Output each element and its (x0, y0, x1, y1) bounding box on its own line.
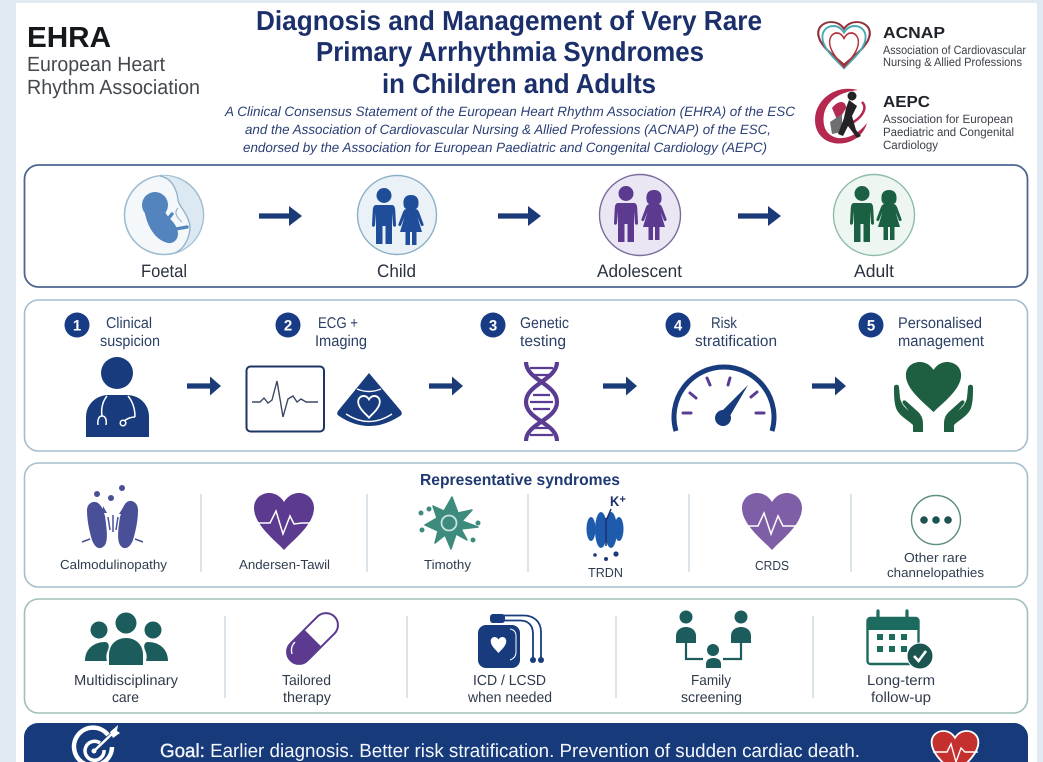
arrow (187, 376, 221, 396)
item: family screening: screening (681, 690, 742, 706)
EHRA logo block: EHRA (27, 22, 111, 54)
AEPC logo: Cardiology (883, 138, 938, 152)
step 2: ECG + imaging: Imaging (315, 333, 367, 350)
AEPC logo: Paediatric and Congenital (883, 125, 1014, 139)
step 4: risk stratification: 4 (674, 318, 683, 334)
label: Adolescent: Adolescent (597, 261, 682, 281)
syndrome: Andersen-Tawil (239, 493, 330, 572)
step 5: personalised management (858, 312, 985, 432)
AEPC logo: AEPC (883, 94, 930, 111)
icon: foetus (124, 176, 204, 254)
title (256, 5, 762, 99)
icon: doctor (86, 357, 149, 437)
syndrome: other rare channelopathies (887, 496, 984, 580)
label: Adult: Adult (854, 261, 894, 281)
step 2: ECG + imaging (246, 312, 402, 432)
ACNAP logo: Association of Cardiovascular (883, 43, 1026, 57)
step 1: clinical suspicion: 1 (73, 318, 81, 334)
step 1: clinical suspicion: Clinical (106, 315, 152, 332)
step 5: personalised management: Personalised (898, 315, 982, 332)
icon: child (358, 176, 436, 254)
step 5: personalised management: management (898, 333, 985, 350)
panel: life stages (24, 165, 1028, 287)
ACNAP logo: ACNAP (883, 25, 945, 42)
step 2: ECG + imaging: ECG + (318, 315, 358, 332)
panel: management (24, 599, 1028, 713)
item: tailored therapy: Tailored (282, 673, 331, 689)
step 5: personalised management: 5 (867, 318, 875, 334)
step 3: genetic testing (480, 312, 569, 441)
step 1: clinical suspicion: suspicion (100, 333, 160, 350)
AEPC logo (815, 89, 1014, 152)
subtitle: A Clinical Consensus Statement of the European Heart Rhythm Association (EHRA) of the ESC (224, 104, 795, 119)
item: long-term follow-up: follow-up (871, 690, 931, 706)
item: ICD / LCSD: ICD / LCSD (473, 673, 546, 689)
syndrome: calmodulinopathy (60, 485, 167, 572)
step 1: clinical suspicion (64, 312, 160, 437)
icon: ECG monitor (246, 366, 324, 432)
item: family screening: Family (691, 673, 732, 689)
item: long-term follow-up: Long-term (867, 673, 935, 689)
icon: heart in hands (894, 362, 973, 432)
arrow (259, 206, 302, 226)
title: in Children and Adults (382, 68, 656, 99)
step 4: risk stratification (666, 312, 777, 431)
EHRA logo block (27, 22, 200, 99)
icon: red heart (932, 731, 978, 762)
icon: adolescent (600, 174, 680, 256)
step 3: genetic testing: Genetic (520, 315, 569, 332)
arrow (498, 206, 541, 226)
syndrome: calmodulinopathy: Calmodulinopathy (60, 557, 167, 572)
step 3: genetic testing: testing (520, 333, 566, 350)
syndrome: TRDN: TRDN (588, 565, 623, 580)
item: ICD / LCSD: when needed (467, 690, 552, 706)
syndrome: CRDS: CRDS (755, 558, 789, 573)
step 3: genetic testing: 3 (489, 318, 497, 334)
item: multidisciplinary care: care (112, 690, 139, 706)
icon: target (74, 725, 120, 762)
label: Foetal: Foetal (141, 261, 187, 281)
arrow (738, 206, 781, 226)
item: family screening (676, 610, 751, 706)
panel: diagnostic pathway (24, 300, 1028, 451)
icon: risk gauge (674, 367, 774, 431)
syndrome: other rare channelopathies: channelopathies (887, 565, 984, 580)
syndrome: Timothy: Timothy (424, 557, 472, 572)
ACNAP logo: Nursing & Allied Professions (883, 55, 1022, 69)
item: multidisciplinary care: Multidisciplinary (74, 673, 179, 689)
step 4: risk stratification: stratification (695, 333, 777, 350)
EHRA logo block: Rhythm Association (27, 76, 200, 99)
icon: DNA helix (526, 362, 557, 441)
title: Diagnosis and Management of Very Rare (256, 5, 762, 36)
label: Child: Child (377, 261, 416, 281)
subtitle (224, 104, 795, 155)
step 4: risk stratification: Risk (711, 315, 737, 332)
panel: representative syndromes (24, 463, 1028, 587)
syndrome: Andersen-Tawil: Andersen-Tawil (239, 557, 330, 572)
goal banner (24, 723, 1028, 762)
arrow (603, 376, 637, 396)
icon: AEPC emblem (815, 89, 867, 144)
ACNAP logo (818, 22, 1026, 69)
item: long-term follow-up (867, 611, 935, 706)
item: tailored therapy: therapy (283, 690, 332, 706)
syndrome: TRDN (586, 493, 626, 580)
title: Primary Arrhythmia Syndromes (316, 36, 704, 67)
item: ICD / LCSD (467, 614, 552, 706)
AEPC logo: Association for European (883, 112, 1013, 126)
subtitle: endorsed by the Association for European Paediatric and Congenital Cardiology (AEPC) (243, 140, 767, 155)
icon: ultrasound (337, 373, 402, 426)
arrow (812, 376, 846, 396)
step 2: ECG + imaging: 2 (284, 318, 292, 334)
syndrome: CRDS (742, 493, 802, 573)
subtitle: and the Association of Cardiovascular Nursing & Allied Professions (ACNAP) of the ESC, (245, 122, 771, 137)
EHRA logo block: European Heart (27, 53, 165, 76)
syndrome: Timothy (418, 497, 480, 572)
icon: nested hearts (818, 22, 870, 68)
syndrome: other rare channelopathies: Other rare (904, 550, 967, 565)
arrow (429, 376, 463, 396)
item: multidisciplinary care (74, 612, 179, 706)
goal text: Goal: Earlier diagnosis. Better risk stratification. Prevention of sudden cardiac death. (160, 741, 860, 762)
syndrome: TRDN: K⁺ (610, 493, 626, 509)
icon: adult (834, 174, 914, 256)
heading: Representative syndromes (420, 472, 620, 489)
item: tailored therapy (282, 608, 343, 706)
